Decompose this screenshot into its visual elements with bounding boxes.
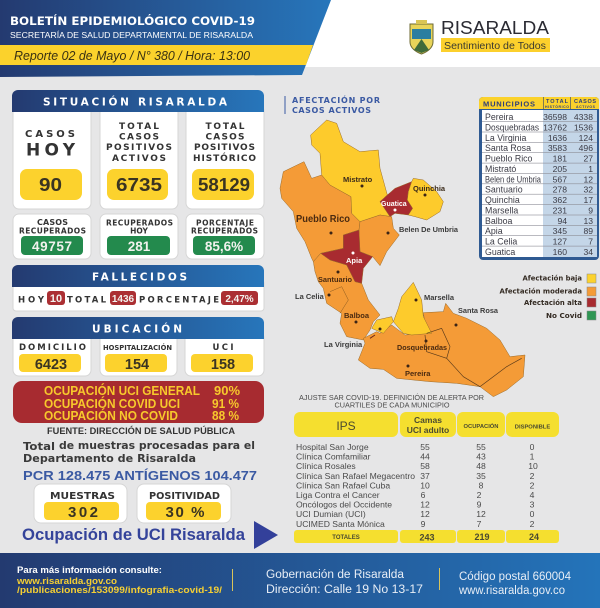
heading: FALLECIDOS: [92, 272, 187, 284]
text block: total de muestras: de muestras procesadas para el: [59, 440, 255, 452]
stat: muestras: MUESTRAS: [50, 491, 115, 502]
heading: UBICACIÓN: [92, 322, 182, 336]
table rows: 13762: [543, 122, 567, 132]
stat: casos hoy: [20, 129, 82, 200]
table rows: Guatica: [485, 247, 515, 257]
footer: more information: /publicaciones/153099/infografia-covid-19/: [17, 585, 223, 595]
table totals: 24: [529, 532, 539, 542]
stat: UCI: UCI: [212, 343, 234, 353]
table rows: [296, 442, 538, 529]
stat: recuperados hoy: RECUPERADOS: [106, 218, 173, 228]
table rows: La Celia: [485, 236, 517, 246]
table rows: 2: [530, 471, 535, 481]
table rows: 94: [557, 216, 567, 226]
stat: casos recuperados: 49757: [32, 239, 72, 254]
text block: total de muestras: [23, 440, 255, 465]
stat: positividad: [137, 484, 231, 523]
heading: ocupación de UCI Risaralda: Ocupación de UCI Risaralda: [22, 525, 246, 544]
stat: total casos positivos activos: 6735: [116, 174, 162, 195]
table rows: 567: [553, 174, 567, 184]
stat: recuperados hoy: 281: [128, 239, 151, 254]
table rows: Santa Rosa: [485, 143, 531, 153]
footer: postal code and website: Código postal 660004: [459, 571, 572, 583]
table rows: 32: [583, 185, 593, 195]
footer: address: [266, 569, 423, 596]
stat: casos hoy: 90: [39, 174, 62, 195]
stat: total casos positivos activos: ACTIVOS: [112, 154, 166, 164]
stat: total casos positivos histórico: HISTÓRICO: [193, 152, 256, 164]
stat: casos hoy: HOY: [26, 140, 76, 160]
table totals: 243: [419, 532, 435, 542]
region: Quinchía: [407, 178, 443, 220]
cards: [13, 105, 264, 209]
stat: hospitalización: HOSPITALIZACIÓN: [103, 343, 172, 352]
stat: porcentaje recuperados: [186, 214, 264, 259]
table header: MUNICIPIOS: [483, 100, 535, 108]
arrow: [254, 521, 278, 549]
stat: hospitalización: [103, 343, 172, 373]
heading: [12, 90, 264, 112]
table rows: 2: [530, 519, 535, 529]
table rows: 9: [588, 205, 593, 215]
table rows: 3583: [548, 143, 567, 153]
table rows: 55: [420, 442, 430, 452]
stat: recuperados hoy: [100, 214, 178, 259]
map labels: Pereira: [405, 369, 431, 378]
map labels: Mistrato: [343, 175, 373, 184]
stat: total casos positivos activos: [106, 122, 172, 200]
table rows: 10: [528, 461, 538, 471]
stat: domicilio: [19, 343, 86, 373]
table header: DISPONIBLE: [515, 424, 550, 430]
map labels: Guatica: [381, 201, 407, 208]
table totals: [294, 530, 559, 543]
region: Pueblo Rico: [280, 162, 360, 262]
table rows: 44: [420, 452, 430, 462]
caption: ajuste SAR: CUARTILES DE CADA MUNICIPIO: [334, 402, 450, 410]
table rows: 48: [476, 461, 486, 471]
stat: porcentaje recuperados: 85,6%: [205, 239, 243, 254]
table header: Camas: [414, 415, 442, 425]
table rows: 6: [421, 490, 426, 500]
map labels: Dosquebradas: [397, 343, 447, 352]
panel: fallecidos: [12, 265, 264, 311]
table rows: Mistrató: [485, 164, 516, 174]
table rows: Liga Contra el Cancer: [296, 490, 380, 500]
table rows: Oncólogos del Occidente: [296, 500, 392, 510]
table totals: TOTALES: [332, 535, 360, 541]
table rows: Clínica Comfamiliar: [296, 452, 371, 462]
footer: more information: www.risaralda.gov.co: [16, 576, 118, 586]
panel: ocupación UCI: OCUPACIÓN UCI GENERAL: [44, 383, 200, 398]
stat: total casos positivos activos: POSITIVOS: [106, 143, 172, 153]
stat: casos recuperados: [13, 214, 91, 259]
table rows: 1: [588, 164, 593, 174]
map points: [328, 184, 458, 368]
footer: address: Dirección: Calle 19 No 13-17: [266, 584, 423, 596]
region: Mistrató: [311, 120, 390, 222]
stat: UCI: [191, 343, 253, 373]
table rows: 8: [479, 480, 484, 490]
table rows: 27: [583, 154, 593, 164]
table rows: 58: [420, 461, 430, 471]
stat row: 10: [50, 293, 62, 305]
table rows: 278: [553, 185, 567, 195]
stat: hospitalización: 154: [125, 357, 149, 373]
stat row: HOY: [18, 296, 45, 306]
table rows: Clínica San Rafael Megacentro: [296, 471, 415, 481]
table rows: 362: [553, 195, 567, 205]
text block: total de muestras: Total: [23, 441, 55, 453]
header band: [0, 0, 600, 77]
stat: positividad: POSITIVIDAD: [149, 491, 220, 502]
footer: postal code and website: [458, 571, 572, 597]
stat: porcentaje recuperados: PORCENTAJE: [196, 218, 254, 228]
table rows: Balboa: [485, 216, 512, 226]
stat row: TOTAL: [67, 296, 107, 306]
heading: afectación por casos activos: CASOS ACTIVOS: [292, 106, 371, 115]
map labels: Quinchia: [413, 184, 446, 193]
footer: more information: [16, 565, 223, 595]
caption: ajuste SAR: AJUSTE SAR COVID-19. DEFINICIÓN DE ALERTA POR: [299, 393, 484, 402]
stat: casos recuperados: RECUPERADOS: [19, 226, 86, 236]
table rows: Marsella: [485, 205, 518, 215]
table header: [294, 412, 559, 437]
subtitle: SECRETARÍA DE SALUD DEPARTAMENTAL DE RISARALDA: [10, 31, 254, 40]
table rows: 4338: [574, 112, 593, 122]
table header: ACTIVOS: [576, 105, 596, 109]
table header: [479, 97, 599, 109]
table rows: 3: [530, 500, 535, 510]
stat: domicilio: DOMICILIO: [19, 343, 86, 353]
legend: [500, 274, 596, 320]
map labels: Belen De Umbria: [399, 225, 459, 234]
table rows: 55: [476, 442, 486, 452]
table rows: 9: [477, 500, 482, 510]
stat row: 1436: [112, 294, 135, 305]
table rows: La Virginia: [485, 133, 527, 143]
table rows: Apia: [485, 226, 503, 236]
table rows: 34: [583, 247, 593, 257]
table rows: 36598: [543, 112, 567, 122]
footer: more information: Para más información consulte:: [17, 565, 162, 575]
table rows: 17: [583, 195, 593, 205]
table rows: 2: [477, 490, 482, 500]
table header: HISTÓRICO: [545, 104, 569, 109]
footer: postal code and website: www.risaralda.gov.co: [458, 585, 565, 597]
map labels: Santuario: [318, 275, 352, 284]
panel: ubicación: [12, 317, 264, 376]
table rows: 124: [579, 133, 593, 143]
table rows: 89: [583, 226, 593, 236]
table: municipios: [479, 97, 599, 260]
table rows: 127: [553, 236, 567, 246]
table rows: UCI Dumian (UCI): [296, 509, 366, 519]
region: Belén de Umbría: [359, 215, 399, 266]
footer: [0, 553, 600, 608]
table rows: 35: [476, 471, 486, 481]
table rows: 1: [530, 452, 535, 462]
region: La Virginia: [372, 317, 393, 333]
table rows: Santuario: [485, 185, 523, 195]
legend: No Covid: [546, 312, 582, 320]
panel: ocupación UCI: [13, 381, 264, 423]
heading: afectación por casos activos: [284, 94, 380, 115]
map labels: La Virginia: [324, 340, 363, 349]
map labels: [295, 175, 499, 378]
table rows: 160: [553, 247, 567, 257]
table rows: 12: [420, 500, 430, 510]
table rows: 1636: [548, 133, 567, 143]
stat: casos hoy: CASOS: [25, 129, 75, 140]
slogan: Sentimiento de Todos: [444, 40, 546, 52]
table rows: 7: [477, 519, 482, 529]
stat: total casos positivos histórico: TOTAL: [206, 122, 245, 132]
report date line: Reporte 02 de Mayo / N° 380 / Hora: 13:00: [14, 49, 250, 63]
stat: muestras: [34, 484, 127, 523]
table rows: 205: [553, 164, 567, 174]
table rows: 13: [583, 216, 593, 226]
caption: ajuste SAR: [299, 393, 484, 410]
stat: total casos positivos activos: TOTAL: [119, 122, 159, 132]
table header: TOTAL: [546, 99, 569, 105]
stat: muestras: 302: [68, 504, 98, 521]
table header: OCUPACIÓN: [464, 422, 498, 430]
stat: total casos positivos histórico: POSITIVOS: [194, 143, 255, 153]
table header: IPS: [336, 419, 356, 433]
stat row: [18, 291, 258, 306]
table rows: Pueblo Rico: [485, 154, 533, 164]
map labels: Santa Rosa: [458, 306, 499, 315]
map labels: La Celia: [295, 292, 325, 301]
heading: afectación por casos activos: AFECTACIÓN POR: [292, 94, 380, 105]
panel: ocupación UCI: OCUPACIÓN COVID UCI: [44, 396, 180, 411]
table header: CASOS: [574, 99, 596, 105]
table rows: 10: [420, 480, 430, 490]
table rows: 12: [583, 174, 593, 184]
table rows: Hospital San Jorge: [296, 442, 369, 452]
table totals: 219: [474, 532, 490, 542]
stat: domicilio: 6423: [35, 357, 67, 373]
legend: Afectación alta: [524, 299, 582, 307]
region: Santuario, La Celia y Balboa: [313, 253, 380, 340]
table rows: 7: [588, 236, 593, 246]
stat: positividad: 30 %: [166, 504, 204, 521]
map labels: Apia: [346, 256, 363, 265]
icon: coat of arms: [410, 20, 433, 54]
table rows: 345: [553, 226, 567, 236]
table rows: 231: [553, 205, 567, 215]
panel: ocupación UCI: 88 %: [212, 408, 239, 423]
legend: Afectación moderada: [500, 288, 582, 296]
source note: FUENTE: DIRECCIÓN DE SALUD PÚBLICA: [47, 425, 235, 437]
table rows: UCIMED Santa Mónica: [296, 519, 385, 529]
stat: porcentaje recuperados: RECUPERADOS: [191, 226, 258, 236]
stat: total casos positivos activos: CASOS: [119, 132, 159, 142]
table row lines: [482, 121, 597, 246]
table rows: 12: [420, 509, 430, 519]
text block: PCR y antígenos: PCR 128.475 ANTÍGENOS 104.477: [23, 468, 257, 483]
map labels: Pueblo Rico: [296, 213, 350, 225]
table rows: 0: [530, 442, 535, 452]
region: Guática: [380, 182, 413, 217]
map: municipios de Risaralda: [280, 120, 525, 397]
table rows: Dosquebradas: [485, 122, 540, 132]
table header: UCI adulto: [407, 425, 449, 435]
region: Pereira, Dosquebradas y Santa Rosa: [358, 303, 525, 397]
region: Marsella: [393, 282, 432, 335]
stat row: PORCENTAJE: [139, 296, 219, 306]
table rows: [485, 112, 593, 257]
logo: Risaralda: [410, 18, 550, 54]
footer: address: Gobernación de Risaralda: [266, 569, 405, 581]
table rows: 181: [553, 154, 567, 164]
cards: [13, 332, 264, 376]
table rows: Clínica Rosales: [296, 461, 356, 471]
table rows: 12: [476, 509, 486, 519]
heading: [12, 265, 264, 287]
table rows: 0: [530, 509, 535, 519]
table rows: 37: [420, 471, 430, 481]
table rows: 9: [421, 519, 426, 529]
table rows: 2: [530, 480, 535, 490]
map labels: Balboa: [344, 311, 370, 320]
table rows: Clínica San Rafael Cuba: [296, 480, 390, 490]
stat: recuperados hoy: HOY: [130, 226, 148, 236]
table rows: 496: [579, 143, 593, 153]
table rows: Belen de Umbria: [485, 174, 541, 184]
heading: [12, 317, 264, 339]
table rows: 1536: [574, 122, 593, 132]
table rows: Pereira: [485, 112, 513, 122]
panel: situación Risaralda: [12, 90, 264, 259]
title: BOLETÍN EPIDEMIOLÓGICO COVID-19: [10, 13, 255, 28]
stat: total casos positivos histórico: 58129: [198, 174, 250, 195]
stat row: 2,47%: [225, 294, 254, 305]
panel: ocupación UCI: 90%: [214, 383, 240, 398]
wordmark: RISARALDA: [441, 18, 549, 38]
legend: Afectación baja: [522, 274, 582, 282]
panel: ocupación UCI: OCUPACIÓN NO COVID: [44, 408, 178, 423]
map labels: Marsella: [424, 293, 455, 302]
table: ocupación UCI por IPS: [294, 412, 559, 543]
table rows: 43: [476, 452, 486, 462]
stat: casos recuperados: CASOS: [37, 218, 68, 227]
stat: total casos positivos histórico: CASOS: [206, 132, 244, 142]
table rows: Quinchia: [485, 195, 520, 205]
text block: total de muestras: Departamento de Risaralda: [23, 453, 196, 465]
heading: SITUACIÓN RISARALDA: [43, 96, 228, 108]
stat: total casos positivos histórico: [192, 122, 256, 200]
table rows: 4: [530, 490, 535, 500]
stat: UCI: 158: [211, 357, 235, 373]
region: Apía: [321, 230, 373, 283]
panel: ocupación UCI: 91 %: [212, 396, 239, 411]
